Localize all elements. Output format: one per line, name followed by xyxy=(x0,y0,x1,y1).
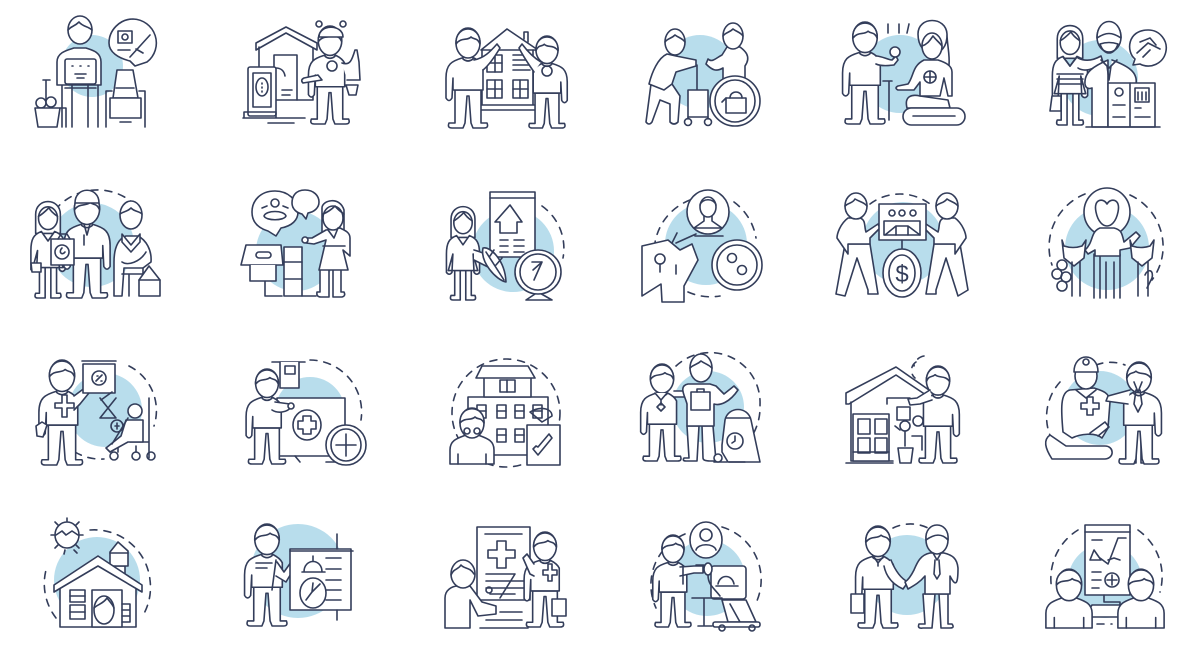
man right xyxy=(519,36,567,128)
laptop xyxy=(704,563,746,599)
man left xyxy=(641,364,688,461)
hanging banner xyxy=(272,362,305,388)
jacket xyxy=(642,233,698,302)
phone with house xyxy=(490,192,535,257)
man xyxy=(908,356,959,463)
woman xyxy=(446,207,498,300)
icon: medical document with two people xyxy=(445,527,566,628)
arrow to pencil xyxy=(1088,595,1120,617)
house xyxy=(846,367,929,463)
woman xyxy=(1050,26,1103,125)
house xyxy=(256,27,317,100)
person xyxy=(1085,228,1140,298)
icon: woman, bearded man and brochure xyxy=(1050,22,1166,127)
wheelchair xyxy=(106,70,145,127)
vacuum xyxy=(714,410,760,462)
man right xyxy=(924,193,968,296)
plus badge xyxy=(326,425,366,465)
speech bubble with brush xyxy=(109,19,156,66)
board xyxy=(290,534,353,620)
mirror xyxy=(515,250,561,300)
round badge with bag xyxy=(710,76,760,126)
sun xyxy=(51,518,83,554)
icon: person with halo and flags xyxy=(1049,188,1163,298)
patient in wheelchair xyxy=(106,398,155,460)
icon: man, monitor and medical plus xyxy=(246,360,366,465)
center man with cap xyxy=(64,190,110,298)
document xyxy=(477,527,530,628)
seated woman xyxy=(896,20,952,108)
document panel xyxy=(274,55,297,100)
small house xyxy=(139,266,160,296)
icon: two men holding up house xyxy=(446,28,567,128)
box xyxy=(241,245,283,296)
brochure xyxy=(1086,83,1160,127)
hospital xyxy=(468,366,548,455)
man xyxy=(653,535,704,627)
man right xyxy=(523,532,566,627)
icon: two men shaking hands xyxy=(851,524,958,628)
walking person xyxy=(646,29,696,124)
phone on stand xyxy=(243,67,305,123)
icon: woman, speech bubbles, box and ladder xyxy=(241,190,350,297)
icon: two caregivers and vacuum xyxy=(641,353,760,462)
ladder xyxy=(284,247,316,296)
left person xyxy=(1046,569,1092,628)
warning symbols xyxy=(100,392,123,432)
profile circle xyxy=(676,190,729,243)
dollar coin: $ xyxy=(895,261,909,288)
handshake bubble xyxy=(1130,30,1166,66)
big speech bubble xyxy=(252,191,298,236)
grapes xyxy=(1052,260,1071,291)
icon: suit jacket, profile and button xyxy=(642,190,762,302)
bucket with shovel xyxy=(35,80,66,127)
icon: woman, phone with house and mirror xyxy=(446,192,564,300)
trolley xyxy=(684,65,712,126)
man xyxy=(246,369,294,464)
man right with clipboard xyxy=(683,354,738,461)
icon: worker with laptop, bucket and wheelchair xyxy=(35,16,156,127)
small speech bubble xyxy=(292,190,319,219)
house xyxy=(476,29,538,110)
profile circle xyxy=(690,522,722,558)
bearded man xyxy=(1085,22,1136,127)
icon: person on crutch, helper and travel bag xyxy=(646,23,760,126)
person with glasses xyxy=(450,408,494,464)
icon: house with sun and chimney xyxy=(44,518,150,627)
leaf xyxy=(483,248,506,282)
man left xyxy=(446,28,500,128)
flag left xyxy=(1062,240,1086,296)
woman with bobble hat xyxy=(302,21,360,124)
icon: man, profile circle, laptop and cart xyxy=(651,522,761,631)
chimney xyxy=(110,542,128,596)
shopping bag xyxy=(51,234,74,265)
icon: man presenting at board xyxy=(245,524,353,626)
steam xyxy=(888,24,909,33)
woman with bag xyxy=(31,202,65,298)
icon: man with cake and woman meditating xyxy=(843,20,965,125)
man xyxy=(245,524,298,626)
icon: report document between two people xyxy=(1046,525,1164,628)
woman xyxy=(302,201,350,297)
icon: seated medic and businessman xyxy=(1046,357,1161,464)
seated man with scarf xyxy=(114,201,151,296)
cushion xyxy=(903,108,965,125)
icon: hospital building, person and clipboard xyxy=(450,359,560,467)
icon: doctor, banner and patient in chair xyxy=(36,360,156,465)
monitor xyxy=(277,398,352,462)
helper xyxy=(706,23,748,90)
icon: two men with board and dollar coin xyxy=(836,193,968,297)
right person xyxy=(1118,569,1164,628)
small table xyxy=(883,81,892,120)
seated medic xyxy=(1046,357,1112,459)
businessman xyxy=(1106,362,1161,464)
clipboard with check xyxy=(527,409,560,465)
man left xyxy=(445,560,496,628)
plant xyxy=(895,416,923,463)
man left xyxy=(836,193,880,296)
house xyxy=(54,556,142,627)
flag right xyxy=(1130,240,1154,296)
button xyxy=(712,240,762,290)
man right xyxy=(905,525,958,628)
table and cart xyxy=(692,598,760,631)
icon: house, phone and woman with bag xyxy=(243,21,360,124)
icon: house, plant and man xyxy=(846,356,959,463)
person with laptop xyxy=(57,16,101,127)
board xyxy=(879,204,926,240)
icon: family group with small house xyxy=(31,190,160,298)
document xyxy=(1085,525,1130,595)
banner xyxy=(82,361,116,393)
man left with briefcase xyxy=(851,526,908,628)
man xyxy=(843,22,900,124)
doctor xyxy=(36,360,93,465)
profile circle xyxy=(1084,188,1130,236)
